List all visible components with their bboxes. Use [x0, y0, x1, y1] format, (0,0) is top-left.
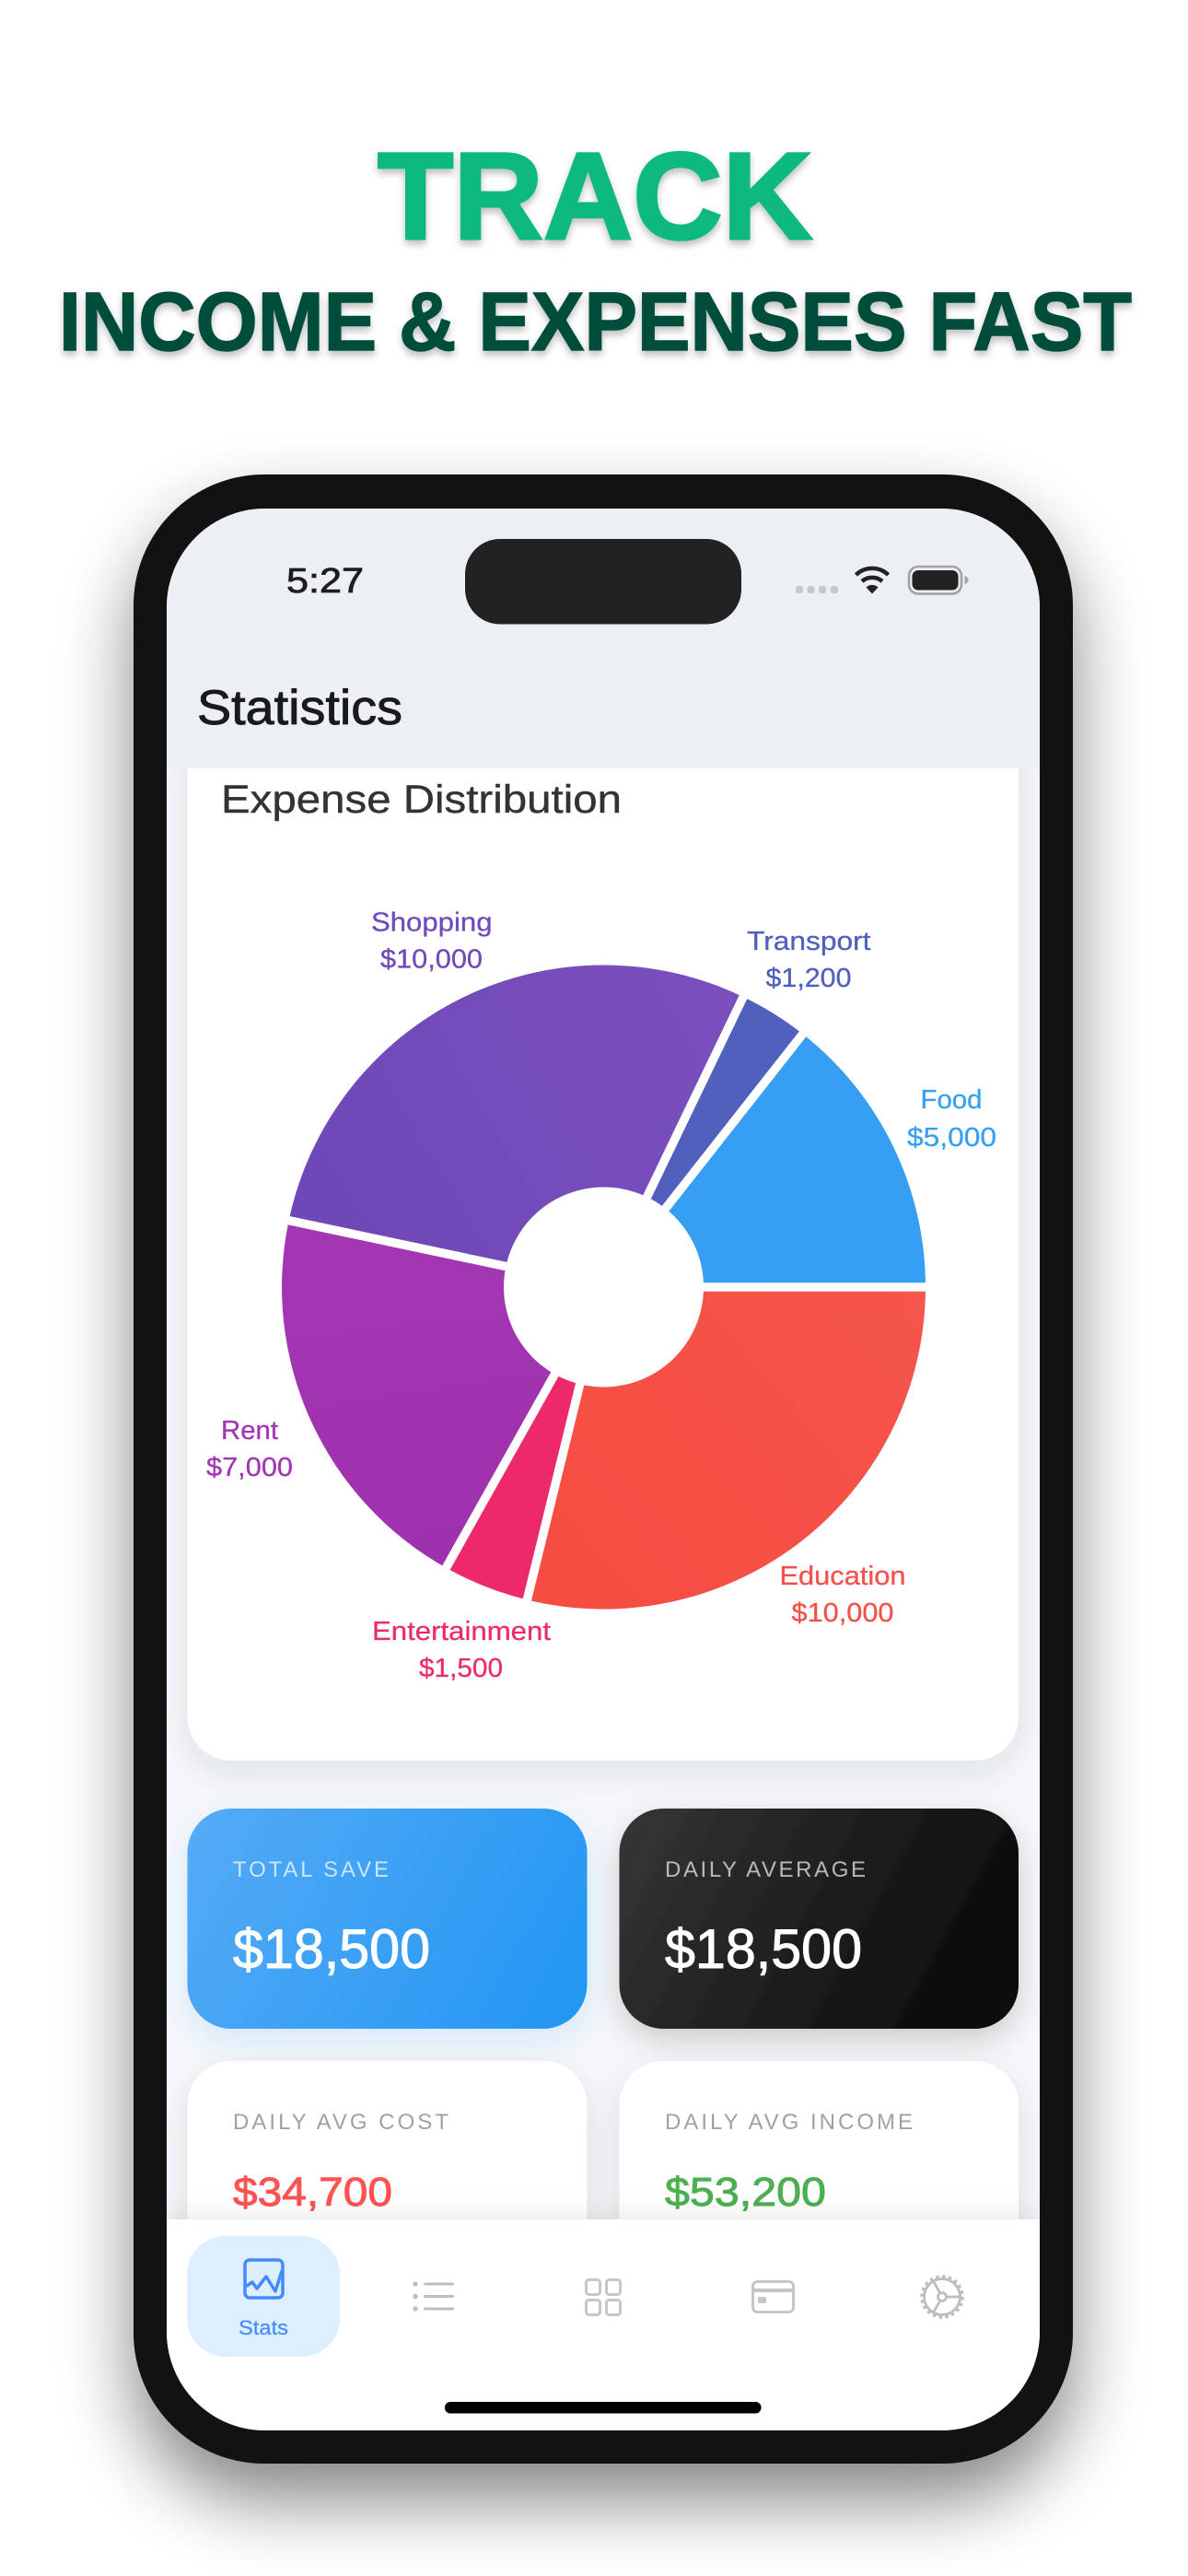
label: education: Education	[779, 1562, 906, 1591]
label: entertainment	[372, 1617, 551, 1683]
stat card: total save: $18,500	[233, 1918, 430, 1980]
status icon: battery	[909, 567, 969, 593]
panel: expense distribution	[188, 719, 1019, 1761]
heading: expense distribution: Expense Distribution	[221, 778, 622, 822]
slice: shopping	[289, 965, 743, 1287]
label: transport: Transport	[747, 927, 871, 956]
stat card: daily avg cost	[181, 2061, 595, 2219]
label: entertainment: Entertainment	[372, 1617, 551, 1646]
label: food: Food	[921, 1085, 982, 1115]
subtitle: income and expenses fast: INCOME & EXPENSES FAST	[59, 276, 1132, 369]
icon: settings gear	[922, 2277, 962, 2317]
stat card: daily avg income: $53,200	[665, 2170, 826, 2215]
slice: education	[527, 1287, 926, 1610]
slice: entertainment	[449, 1376, 577, 1599]
stat card: total save	[188, 1809, 588, 2029]
label: education	[781, 1564, 904, 1625]
active tab: stats	[187, 2236, 340, 2357]
stat card: daily average	[619, 1809, 1019, 2029]
bottom navigation	[167, 2219, 1040, 2441]
stat card: total save: TOTAL SAVE	[233, 1857, 389, 1882]
slice: food	[669, 1036, 926, 1282]
stat card: daily average: DAILY AVERAGE	[665, 1857, 866, 1882]
stat card: daily avg income	[611, 2061, 1026, 2219]
header bar	[167, 509, 1040, 768]
label: shopping: Shopping	[371, 908, 492, 938]
label: education: $10,000	[792, 1598, 893, 1628]
label: transport	[748, 931, 871, 990]
status time: 5:27	[286, 562, 364, 601]
status icon: signal dots	[796, 586, 838, 593]
label: entertainment: $1,500	[419, 1654, 503, 1683]
slice: rent	[282, 1224, 551, 1566]
phone mockup	[134, 474, 1073, 2500]
home indicator	[445, 2402, 761, 2414]
label: rent	[206, 1421, 292, 1480]
status icon: wifi	[856, 568, 888, 593]
icon: chart	[245, 2260, 283, 2298]
phone screen	[167, 509, 1040, 2441]
dynamic island	[465, 539, 741, 625]
stat card: daily average: $18,500	[665, 1918, 862, 1980]
label: rent: Rent	[221, 1416, 278, 1446]
label: rent: $7,000	[206, 1453, 293, 1482]
label: shopping	[372, 911, 491, 971]
label: shopping: $10,000	[380, 945, 483, 975]
label: food: $5,000	[907, 1123, 996, 1153]
title: TRACK: TRACK	[378, 128, 812, 265]
heading: statistics: Statistics	[197, 681, 402, 735]
slice: transport	[650, 999, 799, 1206]
pie chart	[282, 965, 930, 1610]
icon: list	[413, 2281, 454, 2312]
label: food	[907, 1085, 996, 1153]
stat card: daily avg cost: DAILY AVG COST	[233, 2110, 448, 2135]
active tab: stats: Stats	[239, 2316, 288, 2339]
stat card: daily avg cost: $34,700	[233, 2170, 392, 2215]
label: transport: $1,200	[766, 964, 851, 993]
stat card: daily avg income: DAILY AVG INCOME	[665, 2110, 913, 2135]
icon: grid	[586, 2279, 621, 2314]
icon: card	[752, 2281, 794, 2313]
